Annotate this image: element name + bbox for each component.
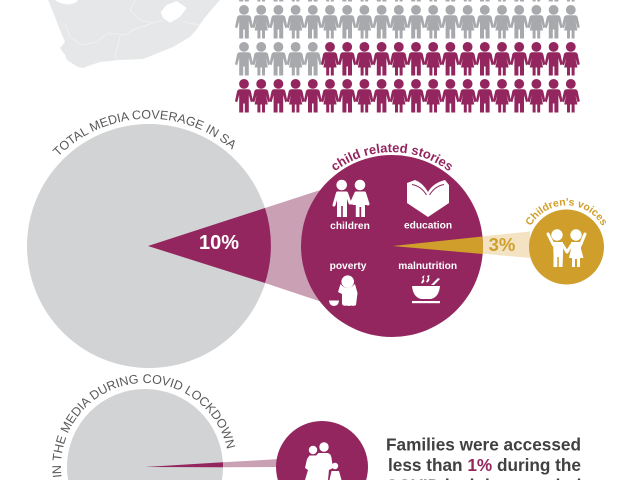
cone: light purple lockdown xyxy=(223,459,280,467)
mixed row grey part xyxy=(235,42,322,76)
icon: family xyxy=(305,442,342,480)
heading: in the media during covid lockdown: IN THE MEDIA DURING COVID LOCKDOWN xyxy=(52,374,236,477)
label: 10%: 10% xyxy=(199,232,239,254)
cone: lockdown wedge xyxy=(145,462,223,467)
pictogram: people grid xyxy=(235,0,580,112)
heading: total media coverage in SA: TOTAL MEDIA COVERAGE IN SA xyxy=(52,110,235,155)
cut-off top row (grey) xyxy=(235,0,580,2)
label: education: education xyxy=(404,220,452,232)
heading: children's voices: Children's voices xyxy=(526,198,606,226)
circle: media during covid lockdown xyxy=(67,389,223,480)
text: families note: less than 1% during the xyxy=(388,455,581,475)
text: families note: Families were accessed xyxy=(386,435,581,455)
label: 3%: 3% xyxy=(489,234,515,255)
circle: children's voices xyxy=(529,210,604,284)
cone: light purple xyxy=(265,188,325,303)
circle: child related stories xyxy=(301,155,483,337)
cone: light gold xyxy=(470,232,530,258)
icon: malnutrition bowl xyxy=(412,275,440,303)
label: poverty: poverty xyxy=(330,261,367,272)
grey row xyxy=(235,5,580,38)
circle: total media coverage xyxy=(27,124,271,368)
purple row xyxy=(235,79,580,112)
label: malnutrition: malnutrition xyxy=(398,261,457,272)
label: children: children xyxy=(330,221,370,232)
circle: families xyxy=(276,421,368,480)
icon: poverty seated figure xyxy=(329,275,358,306)
cone: 10% wedge xyxy=(148,208,271,283)
icon: education book xyxy=(407,180,449,217)
icon: children xyxy=(334,180,368,217)
cone: gold wedge xyxy=(393,236,483,254)
mixed row purple part xyxy=(321,42,580,76)
map: South Africa xyxy=(48,0,220,68)
icon: children with raised arms xyxy=(548,229,585,267)
heading: child related stories: child related stories xyxy=(332,144,452,170)
